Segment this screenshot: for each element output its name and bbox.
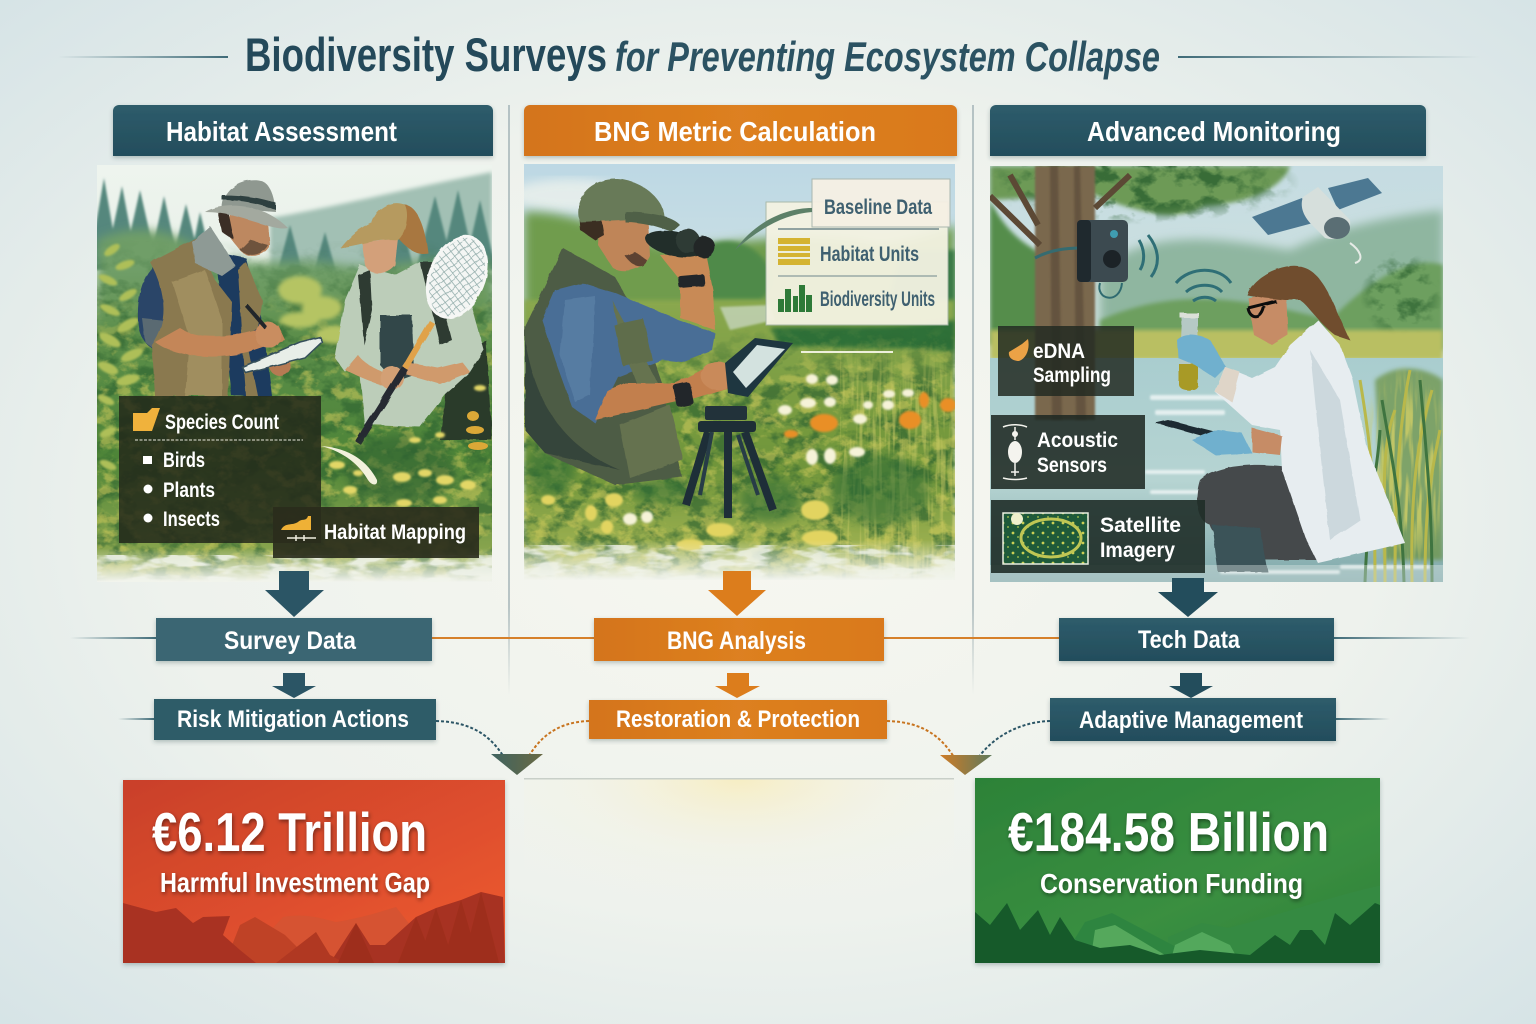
icon: habitat map xyxy=(281,516,316,541)
box: Survey Data xyxy=(156,618,432,661)
outcome: harmful investment gap: €6.12 Trillion xyxy=(152,801,427,863)
icon: biodiversity bars xyxy=(778,285,812,312)
label: habitat mapping: Habitat Mapping xyxy=(324,521,466,544)
forest silhouette xyxy=(975,903,1380,963)
outcome: conservation funding: Conservation Funding xyxy=(1040,868,1303,899)
label: acoustic sensors: Sensors xyxy=(1037,454,1107,477)
label: species count: Birds xyxy=(163,449,205,472)
arrowhead: conservation funding xyxy=(940,755,992,775)
box: Tech Data xyxy=(1059,618,1334,661)
label: species count: Species Count xyxy=(165,411,279,434)
man xyxy=(525,179,735,485)
outcome: harmful investment gap: Harmful Investment Gap xyxy=(160,867,430,898)
box: Restoration & Protection: Restoration & Protection xyxy=(616,706,860,733)
label: species count: Insects xyxy=(163,508,220,531)
forest silhouette xyxy=(123,892,505,963)
icon: satellite xyxy=(1252,178,1382,263)
box: Survey Data: Survey Data xyxy=(224,627,357,655)
label: acoustic sensors: Acoustic xyxy=(1037,429,1118,452)
callout swoosh xyxy=(321,446,377,484)
label: acoustic sensors xyxy=(991,415,1145,489)
header: BNG Metric Calculation xyxy=(524,105,957,156)
header: Advanced Monitoring: Advanced Monitoring xyxy=(1087,116,1341,147)
dashed arrows to outcome boxes xyxy=(436,721,1050,768)
data card: baseline, habitat units, biodiversity units: Habitat Units xyxy=(820,243,919,266)
shrub leaves xyxy=(96,242,145,472)
box: Restoration & Protection xyxy=(589,700,887,739)
title xyxy=(58,28,1480,81)
title: Biodiversity Surveys xyxy=(245,28,607,81)
title: for Preventing Ecosystem Collapse xyxy=(615,33,1160,80)
column: BNG metric calculation xyxy=(510,105,957,580)
label: eDNA sampling: Sampling xyxy=(1033,364,1111,387)
arrow: BNG analysis to restoration xyxy=(715,673,760,698)
icon: satellite image thumbnail xyxy=(1003,513,1088,564)
icon: acoustic sensor on tree xyxy=(1035,220,1128,298)
icon: species checkbox xyxy=(133,408,160,431)
signal waves xyxy=(1139,235,1231,301)
woman with butterfly net xyxy=(335,203,498,443)
box: Adaptive Management: Adaptive Management xyxy=(1079,707,1303,734)
column dividers xyxy=(508,105,974,695)
centre outcome panel xyxy=(524,778,954,963)
box: Tech Data: Tech Data xyxy=(1138,626,1241,654)
column: habitat assessment xyxy=(88,105,498,582)
box: Risk Mitigation Actions: Risk Mitigation Actions xyxy=(177,706,409,733)
arrow: panel to BNG analysis xyxy=(708,571,766,616)
box: BNG Analysis: BNG Analysis xyxy=(667,627,806,655)
illustration: surveyor with binoculars and tablet xyxy=(510,164,956,580)
label: satellite imagery: Satellite xyxy=(1100,514,1181,537)
icon: habitat stripes xyxy=(778,238,810,265)
box: Risk Mitigation Actions xyxy=(154,699,436,740)
icon: eDNA xyxy=(1009,339,1029,361)
arrow: tech data to adaptive management xyxy=(1169,673,1213,698)
wildflowers xyxy=(541,374,956,551)
flow connector lines xyxy=(70,637,1470,720)
arrow: survey data to risk mitigation xyxy=(272,673,316,698)
data card: baseline, habitat units, biodiversity units: Biodiversity Units xyxy=(820,288,935,311)
header: BNG Metric Calculation: BNG Metric Calculation xyxy=(594,116,876,147)
header: Habitat Assessment: Habitat Assessment xyxy=(166,116,397,147)
outcome: conservation funding xyxy=(975,778,1383,963)
data card: baseline, habitat units, biodiversity units xyxy=(735,179,950,325)
label: species count xyxy=(119,396,321,543)
tablet on tripod xyxy=(686,338,793,518)
arrow: panel to tech data xyxy=(1158,578,1218,617)
scientist xyxy=(1155,266,1405,572)
arrowhead: harmful gap xyxy=(491,754,543,775)
label: species count: Plants xyxy=(163,479,215,502)
label: satellite imagery xyxy=(991,500,1205,573)
label: habitat mapping xyxy=(273,507,479,558)
column: advanced monitoring xyxy=(980,105,1455,582)
outcome: harmful investment gap xyxy=(123,780,505,963)
flowers xyxy=(329,385,486,507)
header: Advanced Monitoring xyxy=(990,105,1426,156)
label: eDNA sampling: eDNA xyxy=(1033,340,1085,363)
icon: acoustic microphone xyxy=(1003,425,1027,480)
illustration: field surveyors in forest meadow xyxy=(88,165,498,582)
illustration: scientist with sensors in wetland xyxy=(990,166,1443,582)
reeds xyxy=(1375,368,1443,560)
outcome: conservation funding: €184.58 Billion xyxy=(1008,801,1329,863)
tablet data stroke xyxy=(801,351,893,353)
arrow: panel to survey data xyxy=(265,571,324,617)
box: BNG Analysis xyxy=(594,618,884,661)
label: eDNA sampling xyxy=(998,326,1134,396)
header: Habitat Assessment xyxy=(113,105,493,156)
man with notebook xyxy=(138,180,322,396)
data card: baseline, habitat units, biodiversity units: Baseline Data xyxy=(824,196,932,219)
box: Adaptive Management xyxy=(1050,698,1336,741)
label: satellite imagery: Imagery xyxy=(1100,539,1175,562)
